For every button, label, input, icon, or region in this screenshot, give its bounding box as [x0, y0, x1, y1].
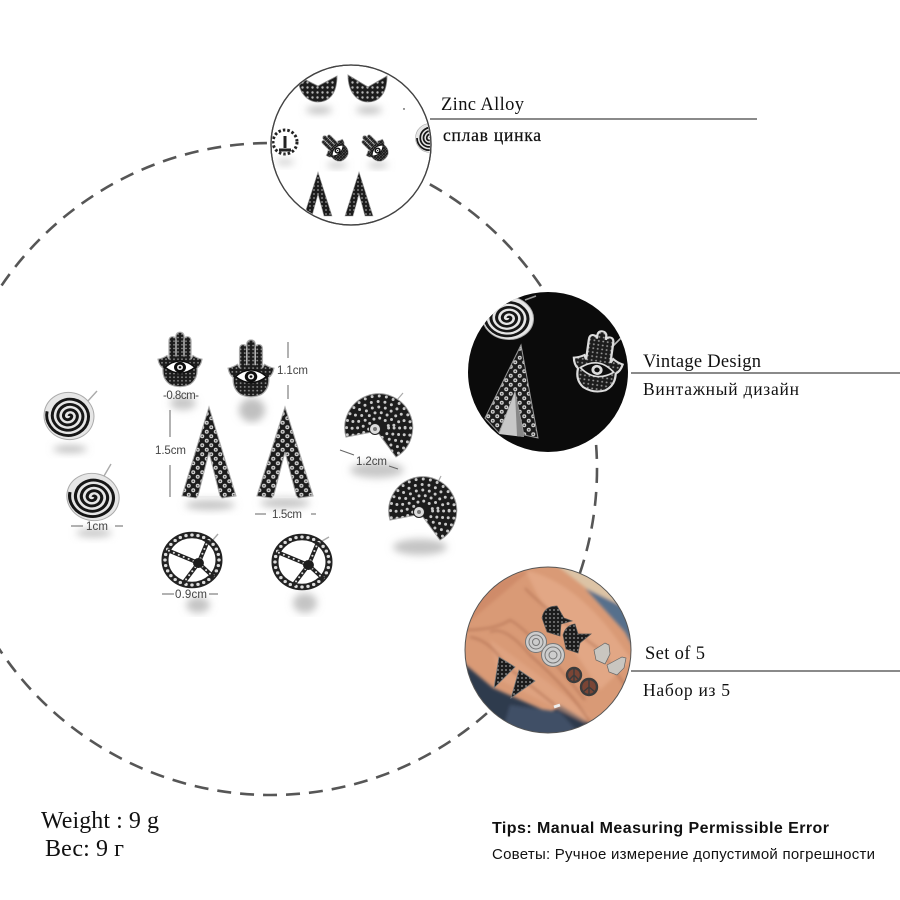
weight text: Weight : 9 g	[41, 808, 159, 834]
callout: zinc alloy: сплав цинка	[443, 125, 541, 145]
callout: vintage design: Винтажный дизайн	[643, 379, 799, 399]
panel: main earrings display	[40, 332, 457, 613]
measurement labels: 0.9cm	[175, 589, 207, 601]
measurement labels: 1.2cm	[356, 456, 387, 468]
callout: set of 5: Набор из 5	[643, 680, 730, 700]
background of photo	[466, 568, 630, 732]
tips text	[492, 820, 875, 863]
dashed circle outline	[0, 143, 597, 795]
spiral earrings	[40, 388, 124, 537]
panel: set worn on hand circle	[464, 566, 632, 734]
measurement labels: 1.5cm	[155, 445, 186, 457]
tips text: Tips: Manual Measuring Permissible Error	[492, 820, 829, 837]
callout: vintage design	[631, 352, 900, 399]
weight text: Вес: 9 г	[45, 836, 124, 862]
panel: vintage design close-up circle	[468, 292, 628, 452]
callout: set of 5: Set of 5	[645, 644, 705, 664]
measurement labels	[71, 342, 398, 601]
measurement labels: 1.5cm	[272, 509, 302, 521]
ring	[554, 705, 560, 707]
tips text: Советы: Ручное измерение допустимой погрешности	[492, 846, 875, 863]
callout: vintage design: Vintage Design	[643, 352, 761, 372]
callout: zinc alloy: Zinc Alloy	[441, 95, 525, 115]
fan earrings	[345, 393, 457, 555]
callout: set of 5	[631, 644, 900, 700]
weight text	[41, 808, 159, 862]
finger creases	[465, 588, 632, 722]
earrings on hand	[494, 606, 626, 698]
callout: zinc alloy	[430, 95, 757, 145]
measurement labels: 1cm	[86, 521, 108, 533]
measurement labels: -0.8cm-	[163, 390, 199, 402]
measurement labels: 1.1cm	[277, 365, 308, 377]
panel: material close-up circle	[271, 65, 444, 225]
triangle earrings	[182, 407, 313, 510]
peace earrings	[165, 534, 329, 613]
hamsa earrings	[158, 332, 274, 422]
